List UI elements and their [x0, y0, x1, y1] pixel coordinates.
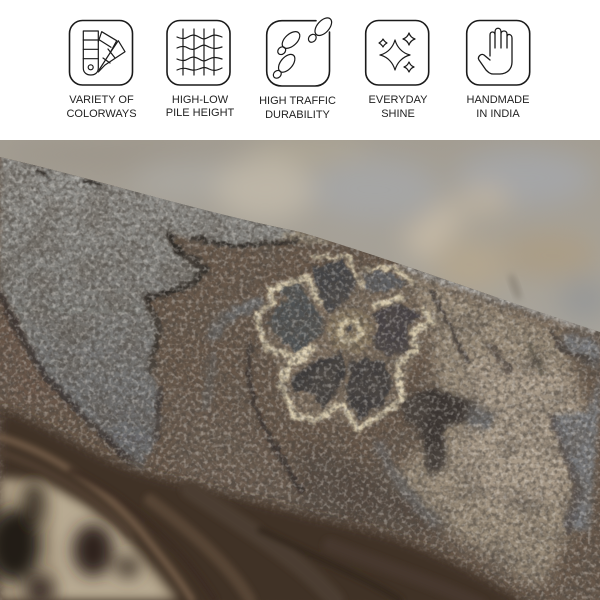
- wool texture: [0, 140, 600, 600]
- dark motif below the flower: [402, 387, 497, 476]
- label: high-low pile height: HIGH-LOW: [172, 94, 228, 106]
- label: high-low pile height: [166, 94, 234, 119]
- label: everyday shine: SHINE: [381, 108, 415, 120]
- blurred background floor: [0, 140, 600, 332]
- icon: colour fan: [68, 17, 530, 87]
- grey field on the right: [550, 333, 600, 530]
- label: high-low pile height: PILE HEIGHT: [166, 107, 234, 119]
- label: handmade in India: HANDMADE: [467, 94, 529, 106]
- medallion centre: [328, 312, 373, 352]
- pale rim along the top edge: [400, 262, 600, 330]
- label: everyday shine: [369, 94, 428, 120]
- cream pattern on the reverse side: [0, 478, 178, 600]
- label: everyday shine: EVERYDAY: [369, 94, 427, 106]
- icon: footprints: [267, 15, 335, 86]
- grey patch in brown field: [213, 302, 258, 335]
- rug roll surface: [0, 140, 600, 600]
- label: variety of colorways: COLORWAYS: [66, 108, 137, 120]
- dark border lines: [0, 170, 595, 530]
- flower medallion: [257, 257, 497, 476]
- icon: hand: [467, 20, 530, 85]
- cream outline: [257, 257, 433, 430]
- label: variety of colorways: VARIETY OF: [69, 94, 134, 106]
- label: variety of colorways: [66, 94, 137, 120]
- icon: sparkles: [366, 20, 429, 85]
- label: handmade in India: [467, 94, 529, 120]
- label: handmade in India: IN INDIA: [476, 108, 520, 120]
- label: high traffic durability: DURABILITY: [265, 108, 330, 120]
- tan field on the right: [300, 272, 589, 590]
- grey field on the left: [0, 150, 300, 470]
- underside of the rug: [0, 408, 535, 600]
- icon: pile grid: [167, 20, 230, 85]
- label: high traffic durability: HIGH TRAFFIC: [259, 95, 336, 107]
- label: high traffic durability: [259, 95, 336, 120]
